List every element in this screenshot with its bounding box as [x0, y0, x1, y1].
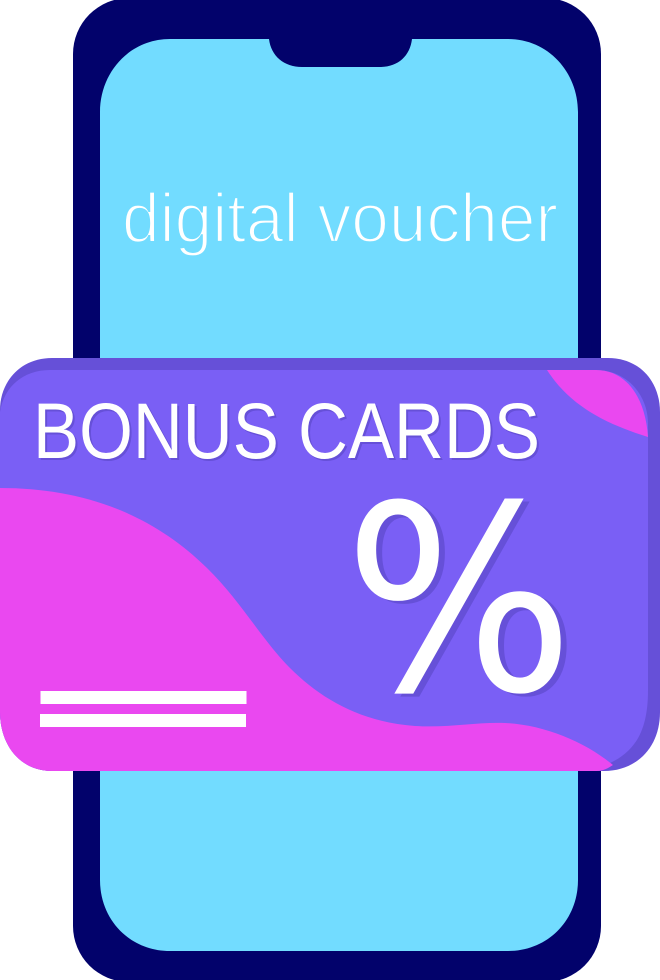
phone screen [100, 39, 578, 951]
phone body [73, 0, 601, 980]
pink corner shape [547, 370, 648, 437]
card face [0, 370, 648, 771]
bonus card [0, 358, 660, 771]
percent shadow: % [350, 454, 580, 754]
card edge [0, 358, 660, 771]
screen text: digital voucher: digital voucher [122, 179, 558, 257]
card number lines [40, 691, 246, 727]
card heading shadow: BONUS CARDS [35, 388, 542, 477]
percent sign: % [344, 451, 574, 751]
card heading: BONUS CARDS: BONUS CARDS [33, 386, 540, 475]
pink wave shape [0, 488, 613, 771]
